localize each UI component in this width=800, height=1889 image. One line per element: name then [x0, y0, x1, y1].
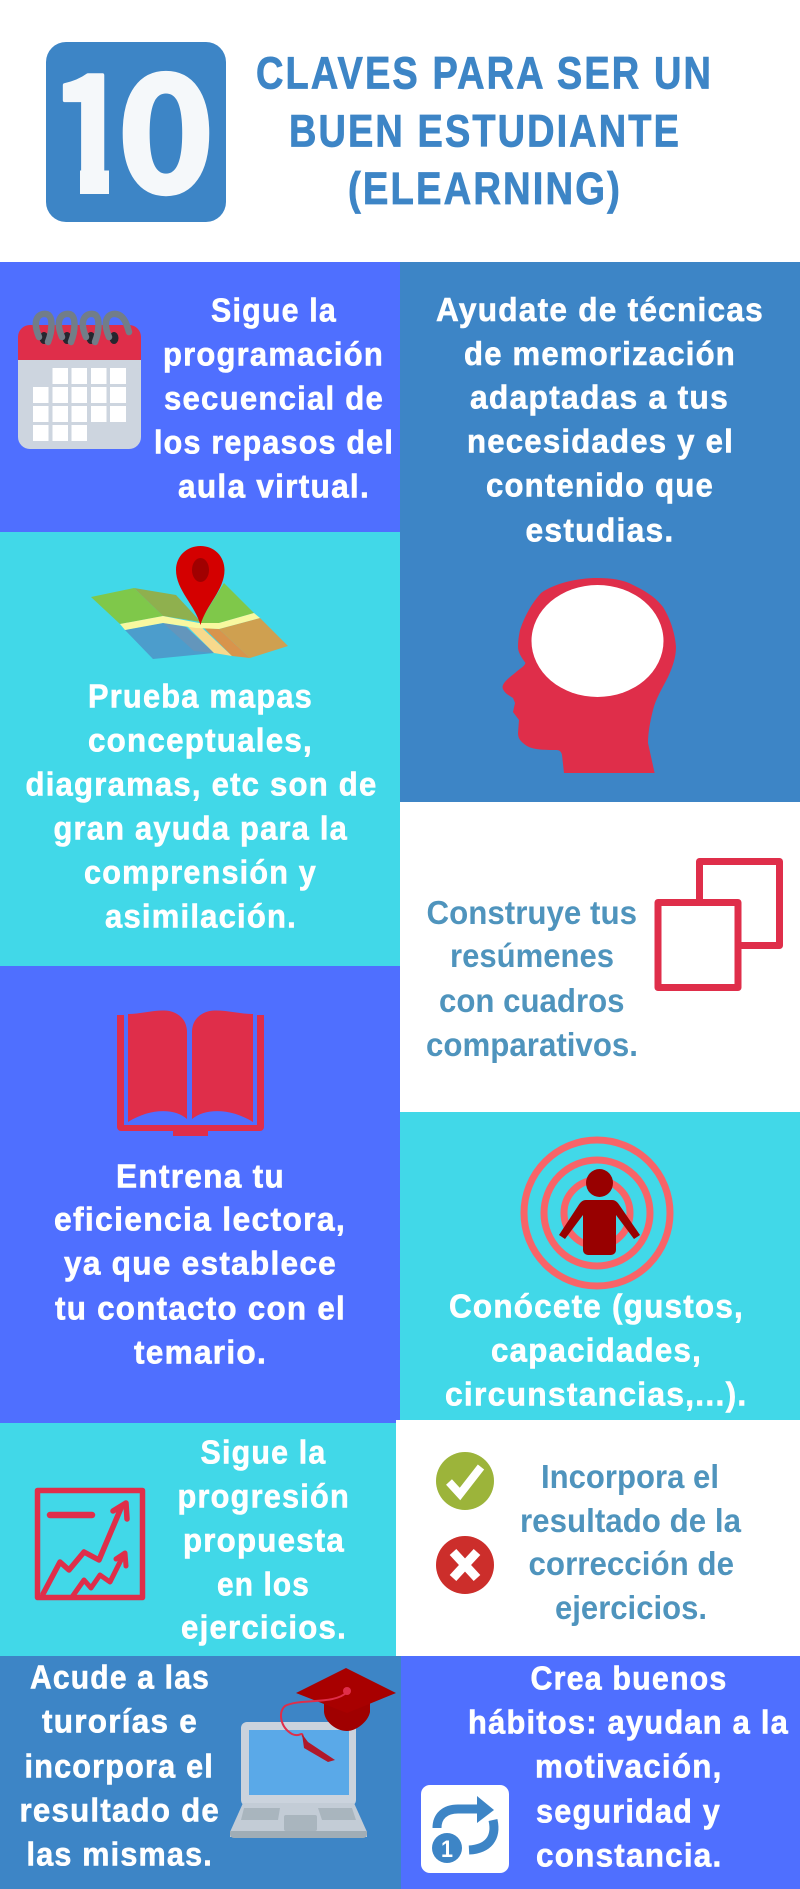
text block: ejercicios.: [555, 1589, 707, 1626]
text block: [445, 1288, 748, 1412]
text block: tu contacto con el: [55, 1290, 346, 1326]
text block: resúmenes: [450, 937, 614, 974]
text block: Ayudate de técnicas: [436, 291, 764, 328]
title: (ELEARNING): [348, 163, 622, 214]
text block: Incorpora el: [541, 1458, 719, 1495]
icon: number 10 tile: [46, 4, 226, 239]
title: CLAVES PARA SER UN: [256, 48, 713, 98]
icon: person in target: [524, 1140, 670, 1286]
icon: repeat once: 1: [441, 1836, 453, 1863]
text block: programación: [163, 336, 384, 372]
text block: circunstancias,...).: [445, 1376, 748, 1412]
text block: Sigue la: [200, 1434, 326, 1470]
icon: calendar: [18, 314, 141, 449]
text block: diagramas, etc son de: [26, 766, 378, 802]
text block: Construye tus: [426, 894, 637, 931]
icon: check mark: [436, 1452, 494, 1510]
panel: programación secuencial: [0, 262, 400, 532]
text block: turorías e: [42, 1702, 198, 1740]
text block: constancia.: [536, 1836, 722, 1874]
text block: [26, 678, 378, 934]
panel: progresión de ejercicios: [0, 1423, 396, 1656]
text block: eficiencia lectora,: [54, 1200, 346, 1238]
icon: cross mark: [436, 1536, 494, 1594]
header: [46, 4, 713, 239]
icon: number 10 tile: 0: [118, 4, 214, 239]
text block: gran ayuda para la: [54, 810, 348, 846]
text block: [436, 291, 764, 548]
text block: comprensión y: [84, 854, 317, 890]
text block: ejercicios.: [181, 1608, 347, 1646]
text block: contenido que: [486, 466, 714, 504]
panel: tutorías: [0, 1656, 401, 1889]
text block: progresión: [178, 1478, 350, 1514]
panel: técnicas de memorización: [400, 262, 800, 802]
text block: aula virtual.: [178, 468, 370, 504]
text block: Acude a las: [30, 1658, 210, 1696]
icon: rising chart: [38, 1490, 142, 1598]
text block: Crea buenos: [530, 1660, 728, 1696]
text block: [426, 894, 638, 1063]
icon: number 10 tile: 1: [50, 4, 130, 239]
icon: laptop with graduation cap: [230, 1668, 396, 1838]
panel: buenos hábitos: [401, 1656, 800, 1889]
panel: conócete: [400, 1112, 800, 1420]
icon: repeat once: [421, 1785, 509, 1873]
text block: en los: [217, 1566, 310, 1602]
text block: [54, 1158, 346, 1370]
text block: capacidades,: [491, 1332, 702, 1368]
text block: [154, 292, 394, 504]
text block: los repasos del: [154, 424, 394, 460]
panel: mapas conceptuales: [0, 532, 400, 966]
panel: eficiencia lectora: [0, 966, 400, 1423]
text block: Sigue la: [211, 292, 337, 328]
text block: resultado de: [20, 1792, 220, 1828]
icon: open book: [117, 1010, 264, 1136]
text block: propuesta: [183, 1522, 345, 1558]
panel: resúmenes y cuadros comparativos: [400, 802, 800, 1112]
text block: seguridad y: [536, 1792, 721, 1830]
text block: de memorización: [464, 335, 736, 372]
text block: [178, 1434, 350, 1646]
icon: overlapping squares: [658, 862, 780, 988]
text block: temario.: [134, 1334, 267, 1370]
text block: Prueba mapas: [88, 678, 313, 714]
text block: secuencial de: [164, 380, 384, 416]
text block: [20, 1658, 220, 1872]
text block: corrección de: [528, 1545, 734, 1582]
text block: comparativos.: [426, 1026, 638, 1063]
title: BUEN ESTUDIANTE: [289, 106, 681, 156]
text block: adaptadas a tus: [470, 378, 729, 416]
panel: resultado de la corrección: [396, 1420, 800, 1656]
text block: ya que establece: [64, 1244, 337, 1282]
text block: con cuadros: [439, 982, 624, 1019]
text block: asimilación.: [105, 898, 297, 934]
text block: las mismas.: [26, 1836, 213, 1872]
text block: necesidades y el: [467, 422, 734, 460]
title: [256, 48, 713, 214]
text block: Entrena tu: [116, 1158, 285, 1194]
text block: Conócete (gustos,: [449, 1288, 744, 1324]
icon: map with pin: [91, 546, 288, 659]
text block: motivación,: [535, 1748, 722, 1784]
text block: conceptuales,: [88, 722, 313, 758]
text block: [468, 1660, 789, 1874]
text block: incorpora el: [24, 1748, 214, 1784]
text block: [520, 1458, 742, 1626]
text block: estudias.: [526, 512, 674, 548]
text block: resultado de la: [520, 1502, 742, 1539]
icon: head: [502, 578, 676, 773]
